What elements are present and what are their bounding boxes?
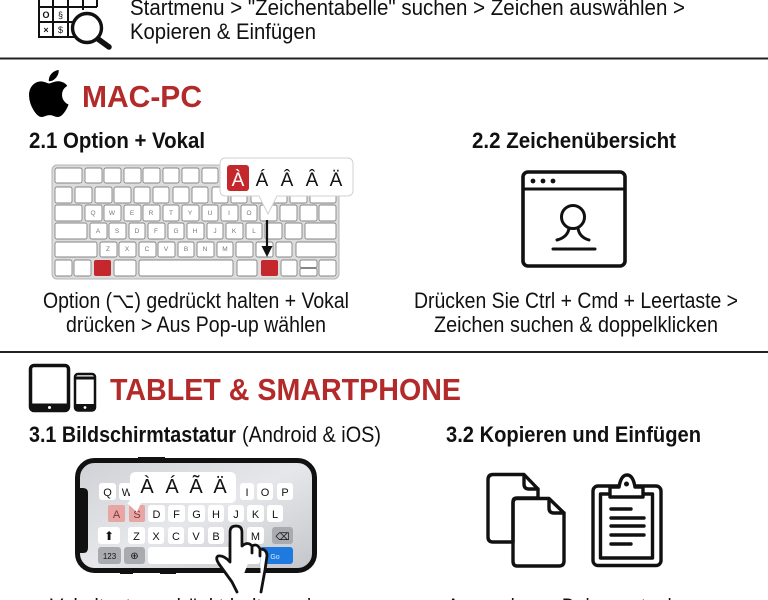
key letters: M (222, 246, 228, 253)
key letters: S (115, 228, 120, 235)
keyboard illustration (52, 158, 353, 279)
key letters: X (125, 246, 130, 253)
key letters: Z (106, 246, 110, 253)
key labels: I (245, 487, 249, 499)
key labels: ⌫ (275, 532, 290, 543)
key letters: Q (90, 210, 96, 217)
text: Windows instructions (130, 0, 685, 44)
accent pop-up: Â (281, 169, 294, 191)
key labels: C (172, 531, 180, 543)
icon: tablet and smartphone (30, 366, 95, 411)
heading: 3.1 Bildschirmtastatur: (Android & iOS) (242, 422, 381, 447)
key letters: I (228, 210, 230, 217)
key labels: G (192, 509, 201, 521)
text: option instructions: Option (⌥) gedrückt halten + Vokal (43, 288, 349, 313)
keyboard keys (55, 168, 336, 276)
key labels: D (153, 509, 161, 521)
key letters: G (173, 228, 179, 235)
key labels: ⬆ (104, 529, 114, 543)
text: Windows instructions: Kopieren & Einfügen (130, 19, 316, 44)
key labels (103, 487, 290, 562)
icon: character table with magnifier (39, 0, 109, 47)
key letters: O (246, 210, 252, 217)
key letters: A (96, 228, 101, 235)
accent pop-up: Ä (213, 476, 227, 498)
accent pop-up (127, 472, 236, 512)
key labels: Go (270, 554, 280, 561)
key letters: B (184, 246, 188, 253)
icon: character table with magnifier: × (43, 25, 49, 35)
keyboard keys (98, 483, 293, 564)
text: character viewer instructions: Zeichen suchen & doppelklicken (434, 312, 718, 337)
heading: 3.1 Bildschirmtastatur (29, 422, 381, 447)
key labels: S (133, 509, 141, 521)
icon: character viewer window (523, 172, 625, 266)
icon: character table with magnifier: § (58, 10, 63, 20)
key letters: F (154, 228, 158, 235)
accent pop-up: Ä (330, 170, 343, 191)
key letters: C (145, 246, 150, 253)
icon: pointing hand (217, 526, 267, 592)
text: option instructions: drücken > Aus Pop-up wählen (66, 312, 326, 337)
accent pop-up: Ã (189, 474, 203, 498)
accent pop-up: À (140, 475, 154, 498)
key letters: Y (188, 210, 193, 217)
text: character viewer instructions (414, 288, 738, 337)
heading: TABLET & SMARTPHONE: TABLET & SMARTPHONE (110, 372, 461, 407)
key labels: W (122, 487, 133, 499)
key labels: Z (133, 531, 140, 543)
heading: 2.1 Option + Vokal: 2.1 Option + Vokal (29, 128, 205, 153)
accent pop-up: Â (306, 169, 319, 191)
key letters: H (193, 228, 198, 235)
key letters: E (130, 210, 135, 217)
smartphone keyboard illustration (75, 457, 314, 592)
key labels: K (252, 509, 260, 521)
key letters: D (135, 228, 140, 235)
icon: apple logo (29, 70, 69, 117)
heading: 2.2 Zeichenübersicht: 2.2 Zeichenübersicht (472, 128, 676, 153)
key labels: X (152, 531, 160, 543)
heading: 3.2 Kopieren und Einfügen: 3.2 Kopieren und Einfügen (446, 422, 701, 447)
icon: copied documents (488, 474, 564, 566)
key labels: H (212, 509, 220, 521)
accent pop-up (220, 158, 353, 214)
accent pop-up: À (232, 170, 245, 191)
key labels: F (173, 509, 180, 521)
key labels: A (113, 509, 121, 521)
key letters: W (109, 210, 116, 217)
key labels: ⊕ (130, 551, 139, 562)
key labels: O (261, 487, 270, 499)
key letters: K (232, 228, 237, 235)
key letters (90, 210, 256, 253)
heading: 3.1 Bildschirmtastatur: 3.1 Bildschirmtastatur (29, 422, 236, 447)
key labels: J (233, 509, 239, 521)
key letters: T (169, 210, 173, 217)
key labels: Q (103, 487, 112, 499)
key letters: U (208, 210, 213, 217)
key letters: L (252, 228, 256, 235)
arrow to option key (262, 220, 272, 257)
key letters: N (203, 246, 208, 253)
key labels: L (272, 509, 278, 521)
accent pop-up: Á (165, 475, 179, 498)
icon: character table with magnifier: $ (58, 25, 63, 35)
icon: character table with magnifier: O (42, 10, 50, 20)
heading: MAC-PC: MAC-PC (82, 79, 202, 114)
key letters: V (164, 246, 169, 253)
key labels: B (212, 531, 220, 543)
accent pop-up: Á (256, 170, 269, 191)
key labels: P (281, 487, 289, 499)
key labels: 123 (103, 552, 117, 561)
key labels: M (251, 531, 260, 543)
key letters: J (213, 228, 217, 235)
key letters: R (149, 210, 154, 217)
text: option instructions (43, 288, 349, 337)
key labels: V (192, 531, 200, 543)
icon: clipboard (593, 475, 661, 566)
